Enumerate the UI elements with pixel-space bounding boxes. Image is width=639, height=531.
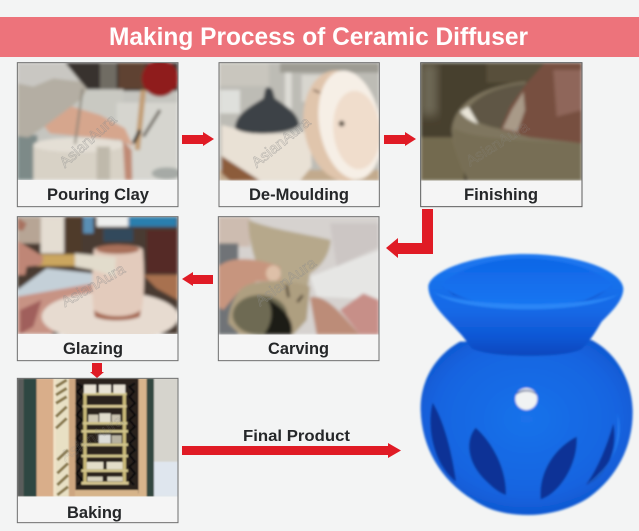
diffuser bowl: [428, 254, 623, 356]
panel: carving: [218, 217, 379, 361]
diffuser body: [421, 340, 633, 515]
panel: glazing: [17, 217, 178, 361]
arrow label: final product: Final Product: [243, 428, 351, 445]
arrow: finishing to carving: [386, 209, 433, 258]
watermark: AsianAura: [58, 260, 129, 311]
watermark: AsianAura: [56, 111, 121, 171]
watermark: AsianAura: [248, 113, 315, 171]
watermark: AsianAura: [252, 254, 320, 310]
title banner: [0, 17, 639, 57]
label: pouring clay: [17, 63, 178, 207]
arrow: final product: [182, 443, 401, 458]
caption: de-moulding: De-Moulding: [249, 186, 349, 204]
arrow: carving to glazing: [182, 272, 213, 286]
caption: finishing: Finishing: [464, 186, 538, 204]
label: de-moulding: [219, 63, 379, 207]
caption: pouring clay: Pouring Clay: [47, 186, 150, 204]
caption: baking: Baking: [67, 504, 122, 522]
panel: finishing: [421, 63, 582, 207]
caption: carving: Carving: [268, 340, 329, 358]
panel: baking: [17, 378, 178, 523]
watermark: AsianAura: [463, 118, 532, 170]
bowl inner: [441, 258, 613, 306]
panel: de-moulding: [219, 63, 390, 207]
product: blue ceramic diffuser: [421, 254, 633, 515]
watermark: AsianAura: [58, 412, 127, 465]
label: baking: [17, 378, 178, 523]
panel: pouring clay: [17, 60, 182, 207]
label: finishing: [421, 63, 582, 207]
caption: glazing: Glazing: [63, 340, 123, 358]
arrow: glazing to baking: [90, 363, 104, 378]
arrow: de-moulding to finishing: [384, 132, 416, 146]
arrow: pouring clay to de-moulding: [182, 132, 214, 146]
cut-out leaves: [430, 403, 456, 482]
label: carving: [218, 217, 379, 361]
label: glazing: [17, 217, 178, 361]
vent hole: [515, 388, 537, 410]
title banner: Making Process of Ceramic Diffuser: [109, 23, 528, 51]
